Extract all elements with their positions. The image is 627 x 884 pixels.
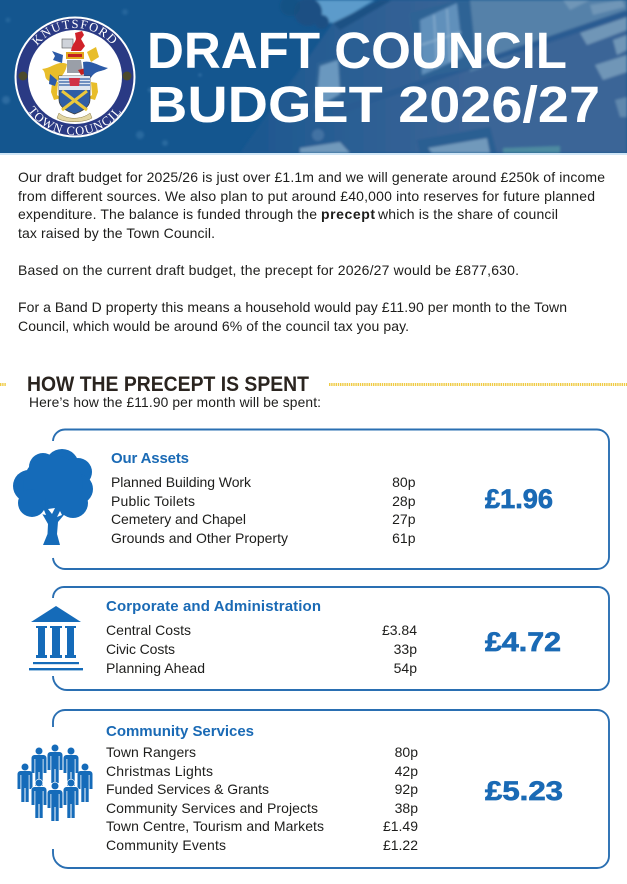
line items: £1.49 [383, 818, 418, 834]
intro text block: expenditure. The balance is funded through the [18, 206, 317, 222]
line items: 61p [392, 530, 416, 546]
total: £4.72 [485, 627, 561, 657]
intro text block: For a Band D property this means a household would pay £11.90 per month to the Town [18, 299, 567, 315]
intro text block: precept [321, 206, 375, 222]
total: £5.23 [485, 776, 563, 806]
heading: Our Assets [111, 450, 189, 467]
line items [106, 622, 417, 676]
line items: 54p [394, 660, 417, 676]
intro text block [18, 169, 605, 334]
panel: our assets [13, 430, 609, 569]
line items: Town Rangers [106, 744, 196, 760]
section heading [0, 373, 627, 410]
line items: 92p [395, 781, 418, 797]
icon: classical building [29, 606, 83, 670]
intro text block: tax raised by the Town Council. [18, 225, 215, 241]
intro text block: from different sources. We also plan to put around £40,000 into reserves for future planned [18, 188, 595, 204]
line items: Community Services and Projects [106, 800, 318, 816]
line items [111, 474, 416, 546]
line items: 28p [392, 493, 416, 509]
crest crown and helmet [66, 52, 89, 75]
title [147, 22, 600, 133]
panel: community services [18, 710, 609, 868]
council logo crest [14, 16, 136, 138]
crest shield [59, 76, 90, 114]
line items: £1.22 [383, 837, 418, 853]
line items: Grounds and Other Property [111, 530, 288, 546]
line items: 80p [395, 744, 418, 760]
heading: Corporate and Administration [106, 598, 321, 615]
line items: Town Centre, Tourism and Markets [106, 818, 324, 834]
logo ring text: Town Council: TOWN COUNCIL [28, 106, 121, 135]
intro text block: Council, which would be around 6% of the council tax you pay. [18, 318, 409, 334]
icon: tree [13, 449, 93, 545]
intro text block: Based on the current draft budget, the precept for 2026/27 would be £877,630. [18, 262, 519, 278]
line items: Civic Costs [106, 641, 175, 657]
header banner [0, 0, 627, 155]
crest scroll [57, 113, 92, 122]
section heading: Here’s how the £11.90 per month will be spent: [29, 395, 321, 410]
crest lion and book [62, 31, 85, 51]
intro text block: Our draft budget for 2025/26 is just over £1.1m and we will generate around £250k of income [18, 169, 605, 185]
heading: Community Services [106, 723, 254, 740]
section heading: HOW THE PRECEPT IS SPENT [27, 373, 309, 396]
total: £1.96 [485, 484, 553, 514]
line items: Community Events [106, 837, 226, 853]
line items: Christmas Lights [106, 763, 213, 779]
line items: 42p [395, 763, 418, 779]
title: DRAFT COUNCIL [147, 22, 567, 79]
line items [106, 744, 418, 853]
line items: Cemetery and Chapel [111, 511, 246, 527]
line items: Central Costs [106, 622, 191, 638]
line items: £3.84 [382, 622, 417, 638]
line items: 27p [392, 511, 416, 527]
line items: Planned Building Work [111, 474, 252, 490]
line items: 80p [392, 474, 416, 490]
line items: 38p [395, 800, 418, 816]
line items: Public Toilets [111, 493, 195, 509]
panel: corporate and administration [29, 587, 609, 690]
icon: group of people [18, 744, 92, 821]
crest mantling [42, 47, 108, 100]
title: BUDGET 2026/27 [147, 76, 600, 133]
line items: Planning Ahead [106, 660, 205, 676]
background building photo [2, 0, 627, 153]
intro text block: which is the share of council [377, 206, 558, 222]
line items: Funded Services & Grants [106, 781, 269, 797]
logo ring text: Knutsford: KNUTSFORD [31, 20, 116, 46]
line items: 33p [394, 641, 417, 657]
